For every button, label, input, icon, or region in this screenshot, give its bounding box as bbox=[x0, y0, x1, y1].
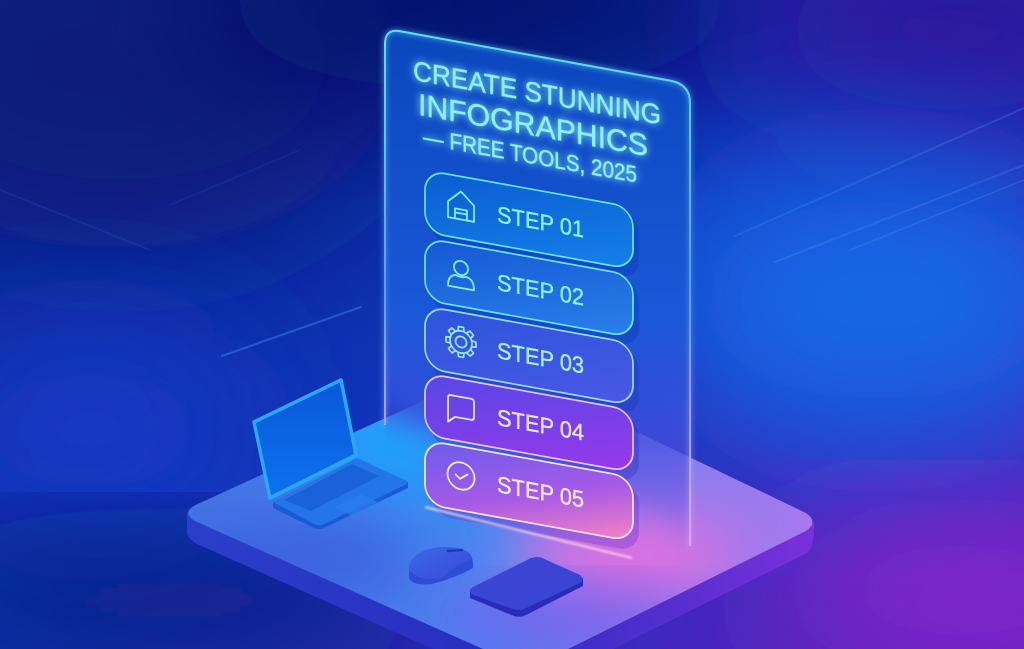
title: INFOGRAPHICS bbox=[418, 87, 648, 163]
keyboard bbox=[284, 464, 379, 511]
title bbox=[413, 54, 661, 192]
step 04: STEP 04 bbox=[497, 404, 584, 446]
step 05 bbox=[425, 440, 639, 552]
icon: check circle bbox=[448, 460, 474, 492]
icon: laptop bbox=[254, 380, 408, 529]
step 05: STEP 05 bbox=[497, 471, 584, 513]
platform top surface bbox=[188, 369, 812, 649]
step 03 bbox=[425, 306, 639, 416]
laptop base bbox=[273, 482, 408, 529]
icon: mouse bbox=[409, 547, 473, 584]
trackpad bbox=[334, 494, 378, 516]
background streaks bbox=[0, 108, 1024, 356]
step 02 bbox=[425, 238, 639, 348]
icon: house bbox=[448, 189, 474, 222]
floor glow line bbox=[425, 507, 632, 558]
icon: speech bubble bbox=[448, 395, 474, 426]
laptop screen bbox=[254, 380, 356, 498]
platform side bbox=[187, 512, 814, 649]
platform desk bbox=[187, 400, 814, 649]
title: — FREE TOOLS, 2025 bbox=[423, 123, 637, 188]
step 03: STEP 03 bbox=[497, 337, 584, 379]
step 01: STEP 01 bbox=[497, 201, 584, 243]
icon: tablet bbox=[470, 557, 583, 617]
step 04 bbox=[425, 373, 639, 483]
panel: glass board bbox=[385, 31, 690, 548]
panel outline bbox=[385, 31, 690, 546]
step 02: STEP 02 bbox=[497, 269, 584, 311]
step 01 bbox=[425, 170, 639, 280]
title: CREATE STUNNING bbox=[413, 54, 661, 130]
icon: gear bbox=[446, 324, 476, 360]
step list bbox=[425, 170, 639, 552]
icon: person bbox=[448, 259, 474, 290]
